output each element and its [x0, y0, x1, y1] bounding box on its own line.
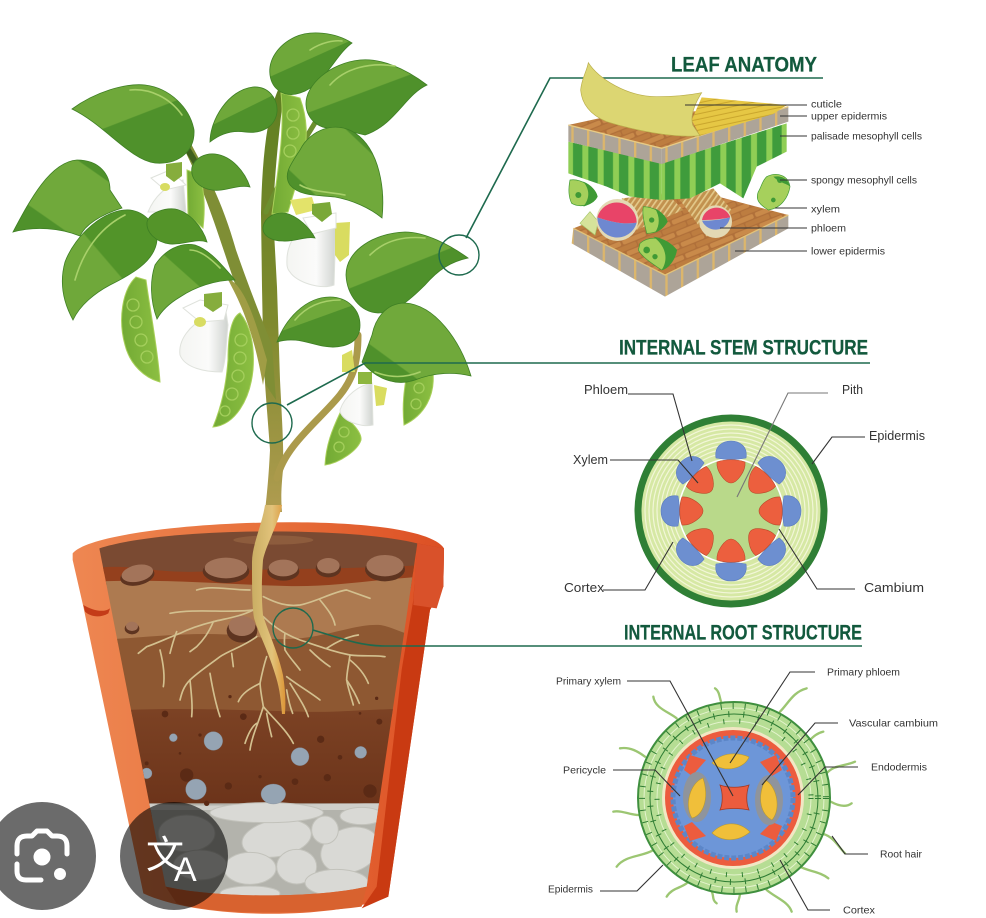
leaf diagram labels	[811, 98, 922, 258]
leaf upper left	[72, 85, 194, 163]
pot interior soil	[93, 520, 427, 903]
leaf left large	[62, 210, 157, 320]
flowers	[148, 162, 387, 426]
callout: root line	[313, 630, 862, 646]
callout: leaf anatomy line	[466, 78, 823, 238]
stem diagram leader lines	[603, 393, 865, 590]
phloem bundles	[661, 441, 801, 581]
gravel pebbles	[141, 732, 367, 804]
light soil layer	[93, 577, 423, 643]
stem diagram labels: Cambium	[864, 580, 924, 595]
leaf diagram labels: lower epidermis	[811, 246, 885, 258]
heading: internal stem structure: INTERNAL STEM STRUCTURE	[619, 336, 868, 360]
spongy mesophyll cells	[569, 174, 790, 270]
stem epidermis	[638, 418, 824, 604]
leaf diagram labels: spongy mesophyll cells	[811, 174, 917, 186]
root cross-section diagram	[613, 688, 855, 912]
leaf cross-section diagram	[568, 63, 790, 297]
red soil band	[93, 565, 423, 588]
root diagram labels: Root hair	[880, 848, 922, 860]
stem diagram labels: Pith	[842, 382, 863, 397]
pot rim shadow	[83, 605, 110, 616]
primary phloem lenses	[688, 754, 777, 840]
pot rim highlight	[413, 543, 444, 608]
leaf upper right	[306, 60, 427, 135]
stems	[183, 90, 358, 512]
leaf diagram label lines	[685, 105, 807, 251]
palisade cells	[568, 123, 787, 200]
root diagram labels: Epidermis	[548, 884, 593, 896]
translate button	[120, 802, 228, 910]
root diagram labels: Pericycle	[563, 764, 606, 776]
stem diagram labels: Cortex	[564, 580, 605, 595]
pot body	[73, 522, 444, 914]
vascular blue tissue	[673, 738, 793, 858]
stem diagram labels	[564, 382, 925, 595]
soil rock shadows	[118, 557, 405, 643]
root diagram labels: Cortex	[843, 904, 876, 916]
leaf highlights	[75, 41, 425, 377]
root diagram labels: Primary phloem	[827, 666, 900, 678]
leaf small centre left	[192, 154, 250, 190]
root epidermis and cortex	[638, 702, 830, 894]
middle soil layer	[117, 624, 404, 716]
roots	[138, 588, 385, 750]
root diagram labels: Primary xylem	[556, 676, 621, 688]
icon: translate: 文	[146, 835, 184, 877]
vascular bundle left	[596, 199, 638, 241]
icon: translate	[146, 835, 197, 889]
callout: stem line	[287, 363, 870, 405]
leaf far left	[13, 160, 122, 236]
leaf diagram labels: phloem	[811, 222, 846, 234]
leaf small	[147, 209, 207, 244]
flower pot	[73, 520, 444, 914]
leaf diagram labels: cuticle	[811, 98, 842, 110]
red corners	[684, 755, 782, 841]
spongy cell shading	[575, 176, 790, 270]
callout: root circle	[273, 608, 313, 648]
leaf centre	[210, 87, 277, 142]
stem cross-section diagram	[638, 418, 824, 604]
vascular bundle right	[699, 205, 732, 238]
root diagram leader lines	[600, 672, 868, 910]
stones layer	[149, 803, 379, 896]
topsoil	[100, 532, 418, 574]
leaf top	[270, 33, 352, 94]
cortex cell rings	[642, 706, 826, 890]
plant illustration	[13, 33, 471, 512]
root diagram labels	[548, 666, 938, 916]
stem diagram labels: Phloem	[584, 382, 628, 397]
flower 3	[180, 292, 228, 372]
pea pods	[122, 93, 433, 465]
soil specks	[145, 695, 382, 806]
pod seeds	[127, 109, 424, 452]
leaf right upper	[346, 232, 468, 313]
heading: leaf anatomy: LEAF ANATOMY	[671, 54, 817, 76]
flower 1	[148, 162, 186, 212]
leaves	[13, 33, 471, 382]
pot lower rim	[166, 887, 367, 913]
flower 2	[287, 197, 350, 287]
pith	[679, 459, 783, 563]
pericycle ring	[665, 730, 801, 866]
leaf small right of stem	[263, 213, 315, 241]
root diagram labels: Vascular cambium	[849, 718, 938, 730]
leaf diagram labels: upper epidermis	[811, 110, 887, 122]
endodermis	[662, 727, 804, 869]
root hairs	[613, 688, 855, 912]
icon: translate: A	[174, 851, 197, 889]
deep soil layer	[131, 709, 393, 816]
leaf diagram labels: palisade mesophyll cells	[811, 130, 922, 142]
primary xylem centre	[720, 785, 749, 810]
stem diagram labels: Xylem	[573, 452, 608, 467]
soil rocks	[120, 555, 404, 636]
leaf right lower	[362, 303, 471, 382]
vein strands	[622, 193, 683, 230]
upper epidermis	[568, 105, 788, 164]
cortex rings	[645, 425, 817, 597]
cambium arcs	[683, 772, 783, 825]
leaf lower left	[151, 244, 235, 319]
root diagram labels: Endodermis	[871, 762, 927, 774]
stem diagram labels: Epidermis	[869, 428, 925, 443]
flower 4	[340, 350, 387, 426]
lower epidermis	[572, 187, 788, 297]
leaf right middle	[277, 297, 360, 347]
callout: leaf circle	[439, 235, 479, 275]
callout: stem circle	[252, 403, 292, 443]
lens button	[0, 802, 96, 910]
pot right shaded wall	[362, 543, 444, 908]
heading: internal root structure: INTERNAL ROOT STRUCTURE	[624, 622, 862, 644]
tap root and stem base	[252, 505, 285, 714]
leaf large centre right	[287, 127, 383, 218]
cuticle	[581, 63, 787, 136]
xylem bundles	[680, 460, 782, 562]
leaf diagram labels: xylem	[811, 204, 840, 216]
icon: camera	[17, 831, 67, 880]
